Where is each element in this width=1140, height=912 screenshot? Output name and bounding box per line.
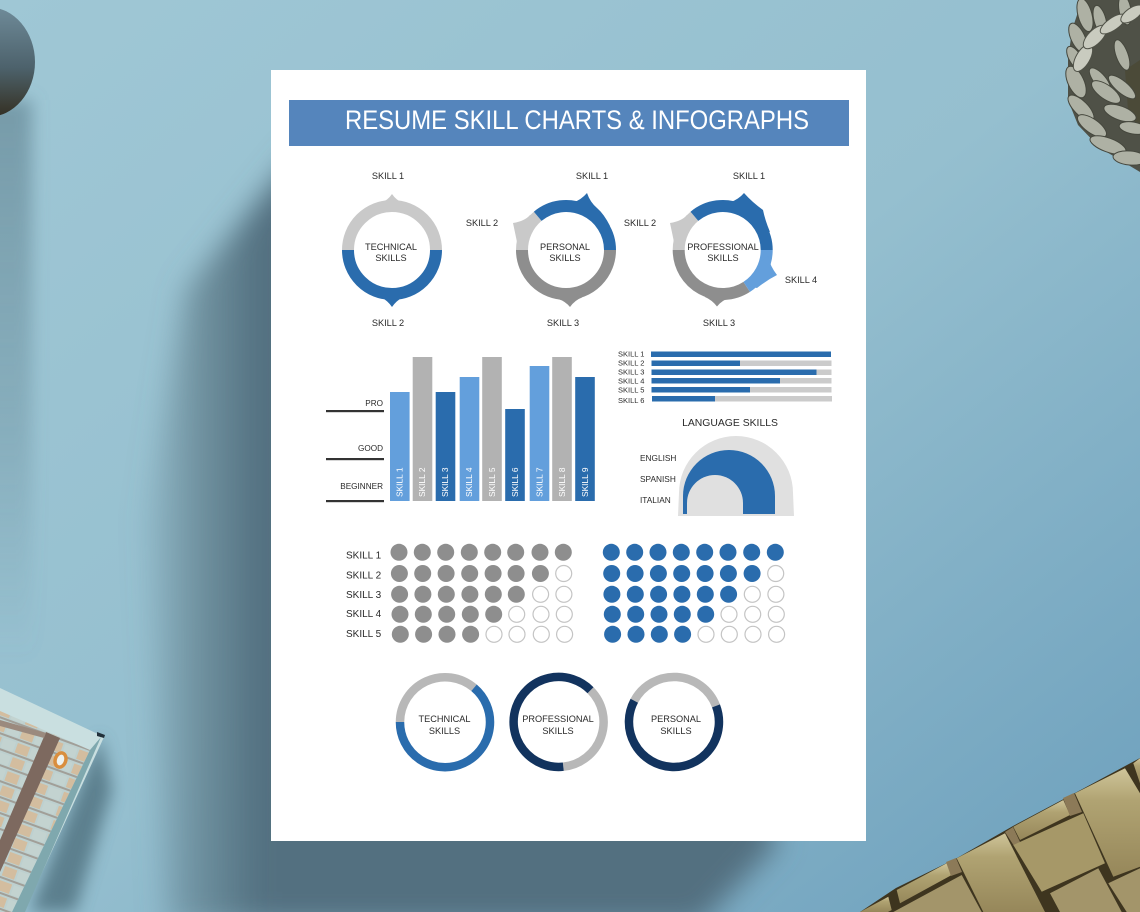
bar chart: skill levels [326,357,595,502]
book shadow [30,735,112,912]
bar labels: SKILL 8 [557,467,567,497]
axis labels and level lines: BEGINNER [340,482,383,491]
bar labels: SKILL 3 [440,467,450,497]
bar labels: SKILL 6 [510,467,520,497]
ring: technical skills: TECHNICAL [418,714,471,724]
horizontal bar chart: skills 1-6: SKILL 2 [618,358,644,368]
dot rating: blue [603,544,785,643]
object: gold woven basket bottom right [860,758,1140,912]
panel: white resume sheet [271,70,866,841]
ring: personal skills [629,677,719,767]
donut: personal skills: SKILL 2 [466,218,498,228]
object: dark sphere top left [0,7,35,117]
concentric arches [678,436,794,516]
horizontal bar chart: skills 1-6: SKILL 3 [618,368,644,376]
title banner: RESUME SKILL CHARTS & INFOGRAPHS [345,105,809,135]
donut: personal skills: SKILLS [549,253,581,263]
axis labels and level lines [326,399,384,502]
bar labels: SKILL 4 [464,467,474,497]
language labels: ENGLISH [640,453,676,463]
bars [390,357,595,501]
object: rope top right [1062,0,1140,172]
dot rating labels: SKILL 4 [346,609,382,620]
bar labels: SKILL 2 [417,467,427,497]
ring: personal skills: SKILLS [660,726,692,736]
donut: professional skills [670,171,817,328]
object: book bottom left [0,688,105,912]
donut: professional skills: SKILL 3 [703,318,735,328]
ring: technical skills: SKILLS [429,726,460,736]
language labels [640,453,676,505]
ring: technical skills [400,677,490,767]
donut: personal skills: SKILL 1 [576,171,608,181]
dot rating labels [346,550,382,640]
horizontal bar chart: skills 1-6: SKILL 5 [618,386,644,394]
donut: technical skills: TECHNICAL [365,242,417,252]
axis labels and level lines: GOOD [358,444,383,453]
language labels: ITALIAN [640,495,671,505]
dot rating: gray [390,544,573,643]
donut: personal skills: SKILL 2 [624,218,656,228]
donut: professional skills: SKILLS [707,253,739,263]
ring: professional skills: PROFESSIONAL [522,714,594,724]
bar labels: SKILL 1 [394,467,404,497]
bar labels: SKILL 5 [487,467,497,497]
dot rating labels: SKILL 3 [346,590,382,601]
horizontal bar chart: skills 1-6: SKILL 6 [618,396,644,405]
horizontal bar chart: skills 1-6 [618,350,832,405]
bar labels [394,467,590,497]
bar labels: SKILL 9 [580,467,590,497]
heading: LANGUAGE SKILLS [682,418,778,429]
donut: personal skills: SKILL 3 [547,318,579,328]
donut: professional skills: SKILL 1 [733,171,765,181]
axis labels and level lines: PRO [365,399,383,408]
bar labels: SKILL 7 [534,467,544,497]
donut: personal skills: PERSONAL [540,242,590,252]
ring: professional skills [514,677,604,767]
horizontal bar chart: skills 1-6: SKILL 1 [618,350,644,358]
donut: personal skills [466,171,656,328]
donut: technical skills: SKILLS [375,253,407,263]
dot rating labels: SKILL 5 [346,629,382,640]
language labels: SPANISH [640,474,676,484]
ring: personal skills: PERSONAL [651,714,701,724]
donut: professional skills: SKILL 4 [785,275,817,285]
language skills chart [640,418,794,516]
dot rating labels: SKILL 1 [346,550,382,562]
sphere shadow [0,100,32,660]
horizontal bar chart: skills 1-6: SKILL 4 [618,376,644,386]
title banner [289,100,849,146]
donut: professional skills: PROFESSIONAL [687,242,759,252]
dot rating labels: SKILL 2 [346,570,382,582]
ring: professional skills: SKILLS [542,726,574,736]
donut: technical skills [348,171,436,328]
donut: technical skills: SKILL 1 [372,171,404,181]
paper shadow [145,150,780,912]
donut: technical skills: SKILL 2 [372,318,404,328]
